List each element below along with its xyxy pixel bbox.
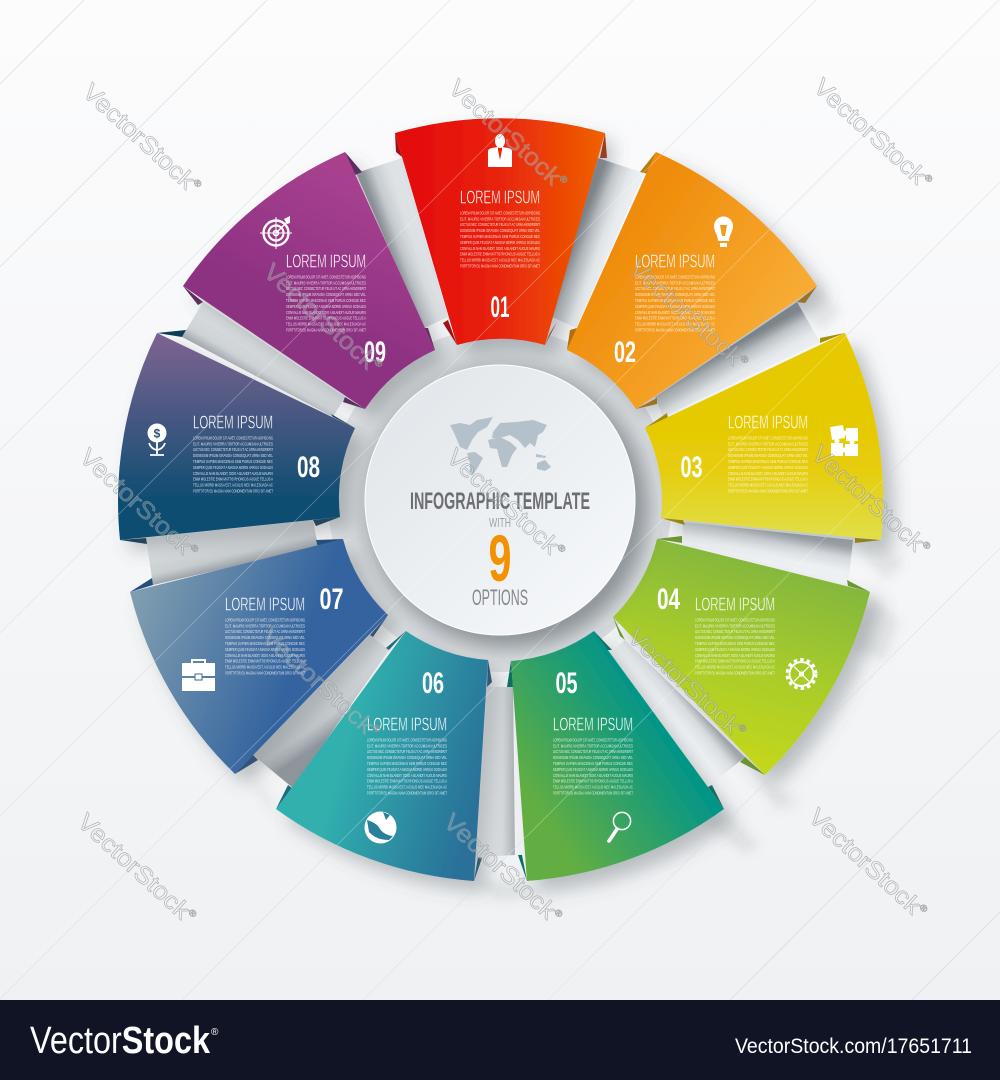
grey connector strips — [146, 158, 853, 857]
text block 03: LOREM IPSUM DOLOR SIT AMET, CONSECTETUR ADIPISCING — [728, 435, 808, 440]
text block 07: PORTTITOR EU MAGNA NAM CONDIMENTUM ORCI SIT AMET — [225, 671, 305, 676]
text block 02: ENIM MOLESTIE ENIM MATTIS RHONCUS AUGUE TELLUS A — [635, 316, 716, 321]
number 09: 09 — [364, 336, 386, 369]
text block 05: DIGNISSIM IPSUM GRAVIDA CONSEQUAT URNA SED VEL — [553, 755, 633, 760]
text block 09: CONVALLIS NAM BLANDIT, ODIO A BLANDIT AUGUE MAURIS — [286, 310, 366, 315]
text block 07: DIGNISSIM IPSUM GRAVIDA CONSEQUAT URNA SED VEL — [225, 635, 305, 640]
text block 07: TELLUS MORBI MASSA EST, IACULIS NEC MALESUADA AC — [225, 665, 305, 670]
watermarks: VectorStock — [72, 809, 185, 915]
text block 01: ENIM MOLESTIE ENIM MATTIS RHONCUS AUGUE TELLUS A — [460, 252, 541, 257]
watermarks: VectorStock — [74, 444, 187, 550]
text block 08: CONVALLIS NAM BLANDIT, ODIO A BLANDIT AUGUE MAURIS — [193, 471, 273, 476]
text block 03 — [728, 435, 809, 494]
footer bar — [0, 1000, 1000, 1080]
text block 04: LECTUS NEC CONSECTETUR FELIS UT AC URNA HENDRERIT — [695, 629, 775, 634]
text block 07: LOREM IPSUM DOLOR SIT AMET, CONSECTETUR ADIPISCING — [225, 617, 305, 622]
wheel base ring — [328, 328, 672, 672]
text block 08 — [193, 435, 274, 494]
text block 03: TEMPUS SAPIEN MAECENAS SEM PURUS CONGUE NEC — [728, 459, 808, 464]
text block 05: LOREM IPSUM DOLOR SIT AMET, CONSECTETUR ADIPISCING — [553, 737, 633, 742]
text block 09: SEMPER QUIS FEUGIAT A MAGNA MORBI VARIUS SODALES — [286, 304, 366, 309]
text block 01: TELLUS MORBI MASSA EST, IACULIS NEC MALESUADA AC — [460, 258, 540, 263]
text block 03: DIGNISSIM IPSUM GRAVIDA CONSEQUAT URNA SED VEL — [728, 453, 808, 458]
text block 07: CONVALLIS NAM BLANDIT, ODIO A BLANDIT AUGUE MAURIS — [225, 653, 305, 658]
text block 02: DIGNISSIM IPSUM GRAVIDA CONSEQUAT URNA SED VEL — [635, 292, 715, 297]
text block 03: CONVALLIS NAM BLANDIT, ODIO A BLANDIT AUGUE MAURIS — [728, 471, 808, 476]
number 03: 03 — [680, 451, 702, 484]
center options label: OPTIONS — [472, 585, 528, 610]
text block 08: LOREM IPSUM DOLOR SIT AMET, CONSECTETUR ADIPISCING — [193, 435, 273, 440]
watermarks: VectorStock — [441, 444, 554, 550]
text block 09: ELIT. MAURIS VIVERRA TORTOR ACCUMSAN ULTRICES — [286, 280, 366, 285]
icon: gear — [787, 660, 816, 688]
footer url: VectorStock.com/17651711 — [735, 1035, 972, 1058]
watermarks: VectorStock — [258, 259, 371, 365]
text block 04: DIGNISSIM IPSUM GRAVIDA CONSEQUAT URNA SED VEL — [695, 635, 775, 640]
text block 09: ENIM MOLESTIE ENIM MATTIS RHONCUS AUGUE TELLUS A — [286, 316, 367, 321]
text block 03: TELLUS MORBI MASSA EST, IACULIS NEC MALESUADA AC — [728, 483, 808, 488]
text block 05: CONVALLIS NAM BLANDIT, ODIO A BLANDIT AUGUE MAURIS — [553, 773, 633, 778]
icon: puzzle — [830, 425, 858, 456]
watermarks: ® — [921, 539, 933, 552]
icon: magnifier — [609, 812, 631, 841]
watermarks: ® — [371, 722, 383, 735]
text block 01: PORTTITOR EU MAGNA NAM CONDIMENTUM ORCI SIT AMET — [460, 263, 540, 268]
panel: segment 05 — [511, 631, 724, 881]
text block 01: SEMPER QUIS FEUGIAT A MAGNA MORBI VARIUS SODALES — [460, 240, 540, 245]
text block 04 — [695, 617, 776, 676]
text block 01 — [460, 210, 541, 268]
heading 02: LOREM IPSUM — [635, 250, 715, 272]
text block 05: ENIM MOLESTIE ENIM MATTIS RHONCUS AUGUE TELLUS A — [553, 779, 634, 784]
text block 04: ENIM MOLESTIE ENIM MATTIS RHONCUS AUGUE TELLUS A — [695, 659, 776, 664]
heading 08: LOREM IPSUM — [193, 412, 273, 432]
watermarks — [72, 74, 937, 930]
text block 03: PORTTITOR EU MAGNA NAM CONDIMENTUM ORCI SIT AMET — [728, 488, 808, 493]
text block 01: DIGNISSIM IPSUM GRAVIDA CONSEQUAT URNA SED VEL — [460, 228, 540, 233]
watermarks: ® — [739, 353, 751, 366]
text block 05: TEMPUS SAPIEN MAECENAS SEM PURUS CONGUE NEC — [553, 761, 633, 766]
text block 06: PORTTITOR EU MAGNA NAM CONDIMENTUM ORCI SIT AMET — [367, 791, 447, 796]
text block 06: CONVALLIS NAM BLANDIT, ODIO A BLANDIT AUGUE MAURIS — [367, 773, 447, 778]
panel: segment 09 — [183, 152, 435, 409]
text block 01: ELIT. MAURIS VIVERRA TORTOR ACCUMSAN ULTRICES — [460, 216, 540, 221]
text block 06: TELLUS MORBI MASSA EST, IACULIS NEC MALESUADA AC — [367, 785, 447, 790]
watermarks: ® — [187, 907, 199, 920]
watermarks: VectorStock — [77, 79, 190, 185]
text block 08: ENIM MOLESTIE ENIM MATTIS RHONCUS AUGUE TELLUS A — [193, 477, 274, 482]
icon: globe — [364, 812, 396, 844]
panel: segment 02 — [567, 152, 817, 409]
watermarks: ® — [918, 902, 930, 915]
watermarks: ® — [923, 172, 935, 185]
text block 04: SEMPER QUIS FEUGIAT A MAGNA MORBI VARIUS SODALES — [695, 647, 775, 652]
text block 09: TEMPUS SAPIEN MAECENAS SEM PURUS CONGUE NEC — [286, 298, 366, 303]
center with label: WITH — [489, 515, 511, 530]
text block 09: DIGNISSIM IPSUM GRAVIDA CONSEQUAT URNA SED VEL — [286, 292, 366, 297]
icon: target — [260, 216, 292, 249]
long cast shadows — [250, 286, 905, 902]
footer logo: VectorStock — [30, 1020, 211, 1062]
panel: segment 06 — [276, 631, 488, 881]
text block 06: DIGNISSIM IPSUM GRAVIDA CONSEQUAT URNA SED VEL — [367, 755, 447, 760]
icon: light bulb — [714, 216, 733, 247]
text block 09: PORTTITOR EU MAGNA NAM CONDIMENTUM ORCI SIT AMET — [286, 327, 366, 332]
watermarks: VectorStock — [256, 624, 369, 730]
center title: INFOGRAPHIC TEMPLATE — [410, 488, 590, 515]
footer registered mark: ® — [211, 1027, 219, 1038]
text block 09: LOREM IPSUM DOLOR SIT AMET, CONSECTETUR ADIPISCING — [286, 274, 366, 279]
watermarks: VectorStock — [443, 75, 556, 181]
watermarks: VectorStock — [803, 804, 916, 910]
icon: briefcase — [182, 660, 215, 691]
text block 02: TEMPUS SAPIEN MAECENAS SEM PURUS CONGUE NEC — [635, 298, 715, 303]
text block 02: LECTUS NEC CONSECTETUR FELIS UT AC URNA HENDRERIT — [635, 286, 715, 291]
text block 01: CONVALLIS NAM BLANDIT, ODIO A BLANDIT AUGUE MAURIS — [460, 246, 540, 251]
text block 01: LECTUS NEC CONSECTETUR FELIS UT AC URNA HENDRERIT — [460, 222, 540, 227]
text block 02: CONVALLIS NAM BLANDIT, ODIO A BLANDIT AUGUE MAURIS — [635, 310, 715, 315]
text block 04: LOREM IPSUM DOLOR SIT AMET, CONSECTETUR ADIPISCING — [695, 617, 775, 622]
text block 06 — [367, 737, 448, 796]
number 06: 06 — [422, 667, 444, 700]
text block 08: PORTTITOR EU MAGNA NAM CONDIMENTUM ORCI SIT AMET — [193, 488, 273, 493]
text block 03: ENIM MOLESTIE ENIM MATTIS RHONCUS AUGUE TELLUS A — [728, 477, 809, 482]
segment fold corners — [120, 133, 881, 881]
text block 02: LOREM IPSUM DOLOR SIT AMET, CONSECTETUR ADIPISCING — [635, 274, 715, 279]
text block 02: SEMPER QUIS FEUGIAT A MAGNA MORBI VARIUS SODALES — [635, 304, 715, 309]
text block 07: ENIM MOLESTIE ENIM MATTIS RHONCUS AUGUE TELLUS A — [225, 659, 306, 664]
text block 03: SEMPER QUIS FEUGIAT A MAGNA MORBI VARIUS SODALES — [728, 465, 808, 470]
text block 05: TELLUS MORBI MASSA EST, IACULIS NEC MALESUADA AC — [553, 785, 633, 790]
text block 07: TEMPUS SAPIEN MAECENAS SEM PURUS CONGUE NEC — [225, 641, 305, 646]
text block 01: TEMPUS SAPIEN MAECENAS SEM PURUS CONGUE NEC — [460, 234, 540, 239]
text block 04: PORTTITOR EU MAGNA NAM CONDIMENTUM ORCI SIT AMET — [695, 671, 775, 676]
text block 01: LOREM IPSUM DOLOR SIT AMET, CONSECTETUR ADIPISCING — [460, 210, 540, 215]
icon: businessman — [488, 134, 512, 167]
text block 06: ELIT. MAURIS VIVERRA TORTOR ACCUMSAN ULTRICES — [367, 743, 447, 748]
text block 07: SEMPER QUIS FEUGIAT A MAGNA MORBI VARIUS SODALES — [225, 647, 305, 652]
text block 08: LECTUS NEC CONSECTETUR FELIS UT AC URNA HENDRERIT — [193, 447, 273, 452]
number 05: 05 — [556, 667, 578, 700]
panel: segment 03 — [645, 333, 883, 540]
watermarks: ® — [192, 177, 204, 190]
text block 04: TEMPUS SAPIEN MAECENAS SEM PURUS CONGUE NEC — [695, 641, 775, 646]
heading 05: LOREM IPSUM — [553, 714, 633, 734]
watermarks: ® — [553, 907, 565, 920]
panel: center disc — [365, 365, 635, 635]
number 08: 08 — [297, 451, 320, 484]
text block 06: ENIM MOLESTIE ENIM MATTIS RHONCUS AUGUE TELLUS A — [367, 779, 448, 784]
text block 02: ELIT. MAURIS VIVERRA TORTOR ACCUMSAN ULTRICES — [635, 280, 715, 285]
text block 03: LECTUS NEC CONSECTETUR FELIS UT AC URNA HENDRERIT — [728, 447, 808, 452]
watermarks: VectorStock — [806, 441, 919, 547]
heading 07: LOREM IPSUM — [225, 594, 305, 614]
watermarks: ® — [373, 357, 385, 370]
watermarks: ® — [189, 542, 201, 555]
text block 03: ELIT. MAURIS VIVERRA TORTOR ACCUMSAN ULTRICES — [728, 441, 808, 446]
text block 05: SEMPER QUIS FEUGIAT A MAGNA MORBI VARIUS SODALES — [553, 767, 633, 772]
number 02: 02 — [614, 336, 636, 369]
panel: segment 08 — [118, 333, 355, 540]
center big number 9: 9 — [488, 521, 512, 595]
number 01: 01 — [490, 291, 510, 324]
text block 02: TELLUS MORBI MASSA EST, IACULIS NEC MALESUADA AC — [635, 322, 715, 327]
text block 08: SEMPER QUIS FEUGIAT A MAGNA MORBI VARIUS SODALES — [193, 465, 273, 470]
panel: segment 04 — [613, 539, 870, 775]
icon: money plant: $ — [154, 426, 161, 440]
heading 06: LOREM IPSUM — [367, 714, 447, 734]
text block 05 — [553, 737, 634, 796]
watermarks: VectorStock — [438, 809, 551, 915]
text block 09 — [286, 274, 367, 332]
text block 08: TEMPUS SAPIEN MAECENAS SEM PURUS CONGUE NEC — [193, 459, 273, 464]
text block 05: PORTTITOR EU MAGNA NAM CONDIMENTUM ORCI SIT AMET — [553, 791, 633, 796]
watermarks: ® — [558, 173, 570, 186]
watermarks: ® — [556, 542, 568, 555]
text block 07 — [225, 617, 306, 676]
text block 04: ELIT. MAURIS VIVERRA TORTOR ACCUMSAN ULTRICES — [695, 623, 775, 628]
text block 06: TEMPUS SAPIEN MAECENAS SEM PURUS CONGUE NEC — [367, 761, 447, 766]
heading 09: LOREM IPSUM — [286, 250, 366, 272]
text block 02: PORTTITOR EU MAGNA NAM CONDIMENTUM ORCI SIT AMET — [635, 327, 715, 332]
text block 07: LECTUS NEC CONSECTETUR FELIS UT AC URNA HENDRERIT — [225, 629, 305, 634]
panel: segment 07 — [130, 539, 388, 774]
text block 06: LOREM IPSUM DOLOR SIT AMET, CONSECTETUR ADIPISCING — [367, 737, 447, 742]
icon: world map — [450, 417, 551, 475]
text block 05: LECTUS NEC CONSECTETUR FELIS UT AC URNA HENDRERIT — [553, 749, 633, 754]
text block 06: SEMPER QUIS FEUGIAT A MAGNA MORBI VARIUS SODALES — [367, 767, 447, 772]
text block 02 — [635, 274, 716, 332]
watermarks: VectorStock — [624, 255, 737, 361]
text block 04: TELLUS MORBI MASSA EST, IACULIS NEC MALESUADA AC — [695, 665, 775, 670]
text block 06: LECTUS NEC CONSECTETUR FELIS UT AC URNA HENDRERIT — [367, 749, 447, 754]
text block 07: ELIT. MAURIS VIVERRA TORTOR ACCUMSAN ULTRICES — [225, 623, 305, 628]
heading 01: LOREM IPSUM — [460, 186, 540, 208]
watermarks: VectorStock — [622, 624, 735, 730]
text block 08: TELLUS MORBI MASSA EST, IACULIS NEC MALESUADA AC — [193, 483, 273, 488]
heading 03: LOREM IPSUM — [728, 412, 808, 432]
text block 08: DIGNISSIM IPSUM GRAVIDA CONSEQUAT URNA SED VEL — [193, 453, 273, 458]
text block 05: ELIT. MAURIS VIVERRA TORTOR ACCUMSAN ULTRICES — [553, 743, 633, 748]
text block 09: LECTUS NEC CONSECTETUR FELIS UT AC URNA HENDRERIT — [286, 286, 366, 291]
icon: money plant — [148, 424, 166, 455]
watermarks: VectorStock — [808, 74, 921, 180]
text block 08: ELIT. MAURIS VIVERRA TORTOR ACCUMSAN ULTRICES — [193, 441, 273, 446]
text block 04: CONVALLIS NAM BLANDIT, ODIO A BLANDIT AUGUE MAURIS — [695, 653, 775, 658]
watermarks: ® — [737, 722, 749, 735]
heading 04: LOREM IPSUM — [695, 594, 775, 614]
number 04: 04 — [657, 583, 680, 616]
number 07: 07 — [320, 583, 344, 616]
text block 09: TELLUS MORBI MASSA EST, IACULIS NEC MALESUADA AC — [286, 322, 366, 327]
panel: segment 01 — [395, 118, 605, 345]
